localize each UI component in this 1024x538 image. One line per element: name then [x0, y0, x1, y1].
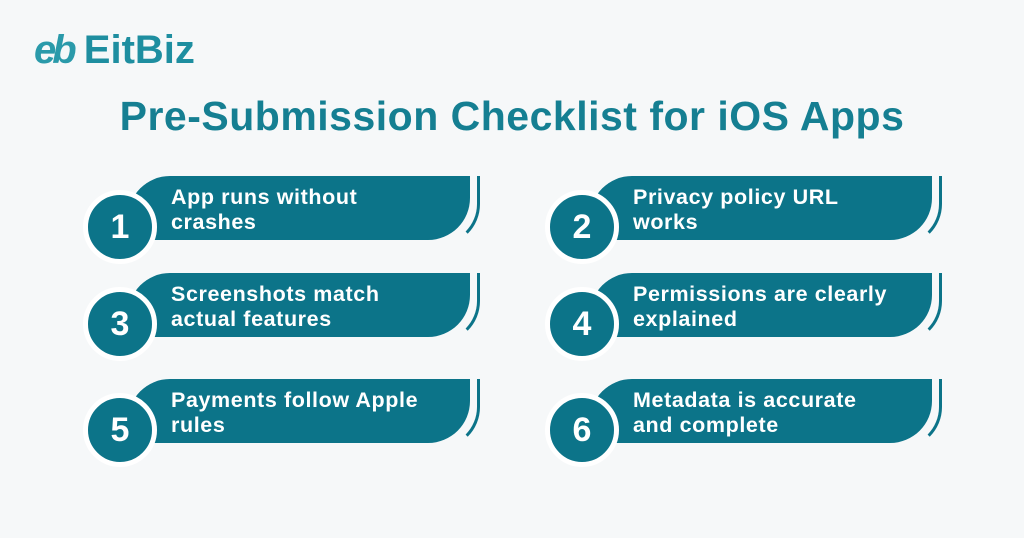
item 5: 5 [111, 411, 129, 449]
item 1: App runs without [171, 185, 357, 209]
item 2: Privacy policy URL [633, 185, 839, 209]
item 3: 3 [111, 305, 129, 343]
item 2: works [633, 210, 698, 234]
item 5: Payments follow Apple [171, 388, 418, 412]
item 3: Screenshots match [171, 282, 380, 306]
item 4 [545, 273, 942, 361]
item 4: Permissions are clearly [633, 282, 887, 306]
item 6: and complete [633, 413, 779, 437]
item 4: 4 [573, 305, 591, 343]
item 4: explained [633, 307, 738, 331]
item 2: 2 [573, 208, 591, 246]
logo: eb EitBiz [34, 28, 195, 72]
item 1 [83, 176, 480, 264]
item 5 [83, 379, 480, 467]
item 5: rules [171, 413, 225, 437]
item 6: 6 [573, 411, 591, 449]
item 2 [545, 176, 942, 264]
item 6: Metadata is accurate [633, 388, 857, 412]
item 3 [83, 273, 480, 361]
title: Pre-Submission Checklist for iOS Apps [120, 93, 904, 139]
item 3: actual features [171, 307, 332, 331]
item 1: crashes [171, 210, 256, 234]
item 1: 1 [111, 208, 129, 246]
item 6 [545, 379, 942, 467]
